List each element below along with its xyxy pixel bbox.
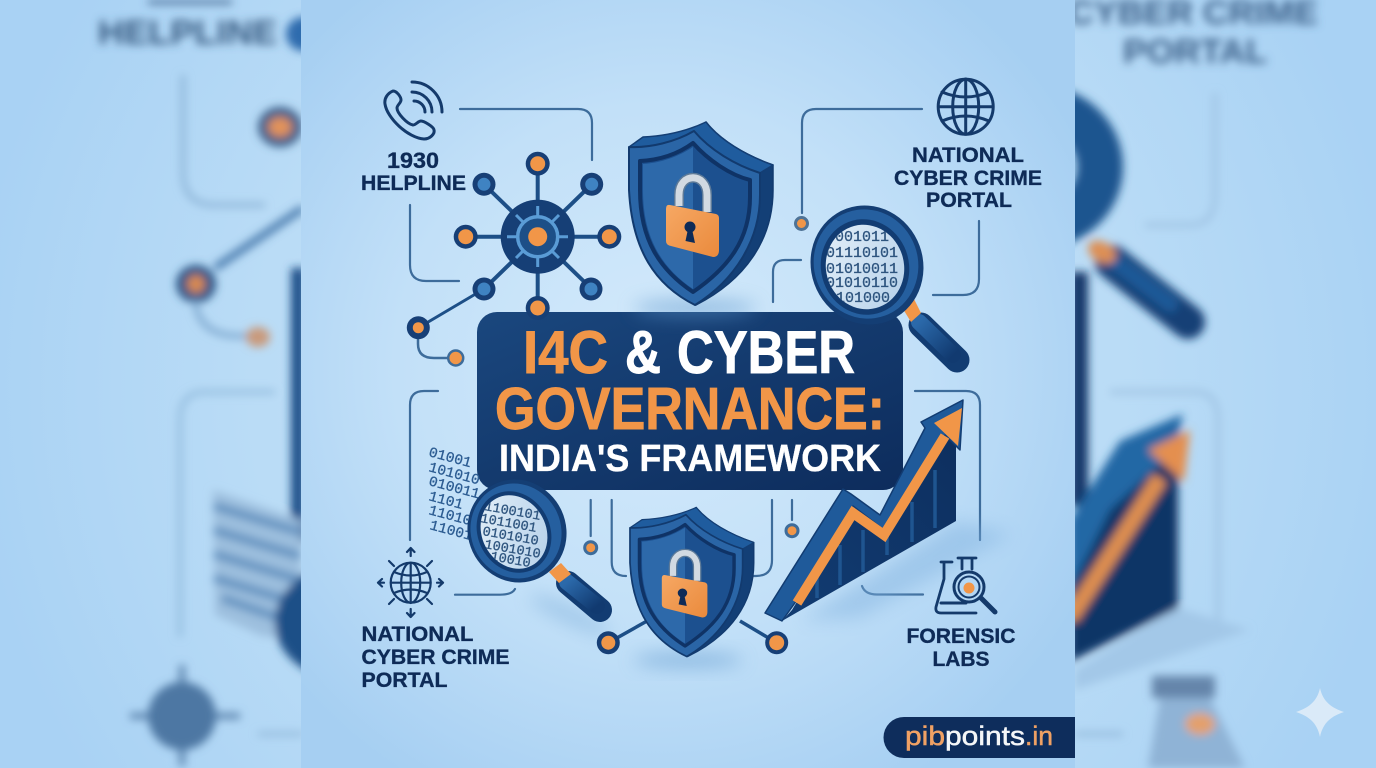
magnifying glass: bottom left: 1011001 <box>479 512 538 537</box>
binary stream: 01001 <box>427 445 473 472</box>
label: 1930 helpline: 1930 <box>387 148 439 173</box>
label: forensic labs: FORENSIC <box>906 625 1016 648</box>
icon: globe <box>938 79 993 134</box>
icon: phone helpline <box>385 82 442 139</box>
website badge: .in <box>1025 721 1053 751</box>
label: national cyber crime portal (top right): CYBER CRIME <box>894 167 1042 190</box>
binary stream: 110101 <box>427 503 481 532</box>
blurred backdrop: left side <box>98 0 415 766</box>
binary stream: 010011 <box>427 474 481 503</box>
label: national cyber crime portal (bottom left) <box>362 623 510 692</box>
label: national cyber crime portal (top right): PORTAL <box>926 189 1012 212</box>
binary stream <box>427 445 482 547</box>
magnifying glass: top right: 01010110 <box>826 275 898 292</box>
connector lines: helpline <box>410 109 592 281</box>
magnifying glass: top right: 01110101 <box>826 245 898 262</box>
magnifying glass: top right <box>794 189 957 360</box>
binary stream: 1101 <box>427 489 464 514</box>
magnifying glass: bottom left: 1100101 <box>483 500 542 525</box>
website badge: points <box>945 721 1025 751</box>
label: national cyber crime portal (top right) <box>894 144 1042 212</box>
label: 1930 helpline: HELPLINE <box>361 172 466 195</box>
title heading <box>495 319 885 480</box>
blurred backdrop: left side: HELPLINE <box>98 14 277 52</box>
blurred backdrop: right side <box>980 0 1318 768</box>
label: forensic labs <box>906 625 1016 671</box>
magnifying glass: bottom left: 10010 <box>489 550 532 572</box>
portal dot <box>796 218 808 230</box>
dots on lower connectors <box>585 525 798 554</box>
label: 1930 helpline <box>361 148 466 195</box>
magnifying glass: bottom left: 0101010 <box>481 525 540 550</box>
icon: globe with outward arrows <box>378 548 443 617</box>
icon: forensic lab flask <box>936 558 995 613</box>
title box <box>477 312 903 490</box>
main artwork <box>361 79 1042 692</box>
bottom shield with padlock and nodes <box>597 507 788 667</box>
website badge: pib <box>905 721 945 751</box>
label: national cyber crime portal (bottom left): NATIONAL <box>362 623 474 646</box>
central panel background <box>301 0 1075 768</box>
label: national cyber crime portal (bottom left): CYBER CRIME <box>362 646 510 669</box>
title heading: CYBER <box>677 319 855 386</box>
icon: sparkle watermark <box>1296 688 1344 737</box>
magnifying glass: bottom left <box>467 481 612 639</box>
binary stream: 110011 <box>428 518 482 547</box>
label: national cyber crime portal (bottom left): PORTAL <box>362 669 448 692</box>
label: forensic labs: LABS <box>932 648 990 671</box>
label: national cyber crime portal (top right): NATIONAL <box>912 144 1024 167</box>
blurred backdrop: right side: PORTAL <box>1123 33 1267 71</box>
rising arrow chart <box>765 400 1012 621</box>
main shield with padlock <box>629 122 773 317</box>
connector lines: portal <box>773 109 979 302</box>
network hub illustration <box>407 152 621 366</box>
title heading: I4C <box>523 319 608 386</box>
title heading: GOVERNANCE: <box>495 376 885 442</box>
title heading: INDIA'S FRAMEWORK <box>499 438 882 480</box>
magnifying glass: bottom left: 1001010 <box>483 538 542 563</box>
magnifying glass: top right: 101000 <box>836 290 890 307</box>
website badge <box>884 717 1075 758</box>
magnifying glass: top right: 01010011 <box>826 261 898 278</box>
binary stream: 101010 <box>427 460 481 489</box>
magnifying glass: top right: 0001011 <box>826 229 889 246</box>
title heading: & <box>625 319 661 386</box>
connector lines: lower <box>410 391 980 595</box>
